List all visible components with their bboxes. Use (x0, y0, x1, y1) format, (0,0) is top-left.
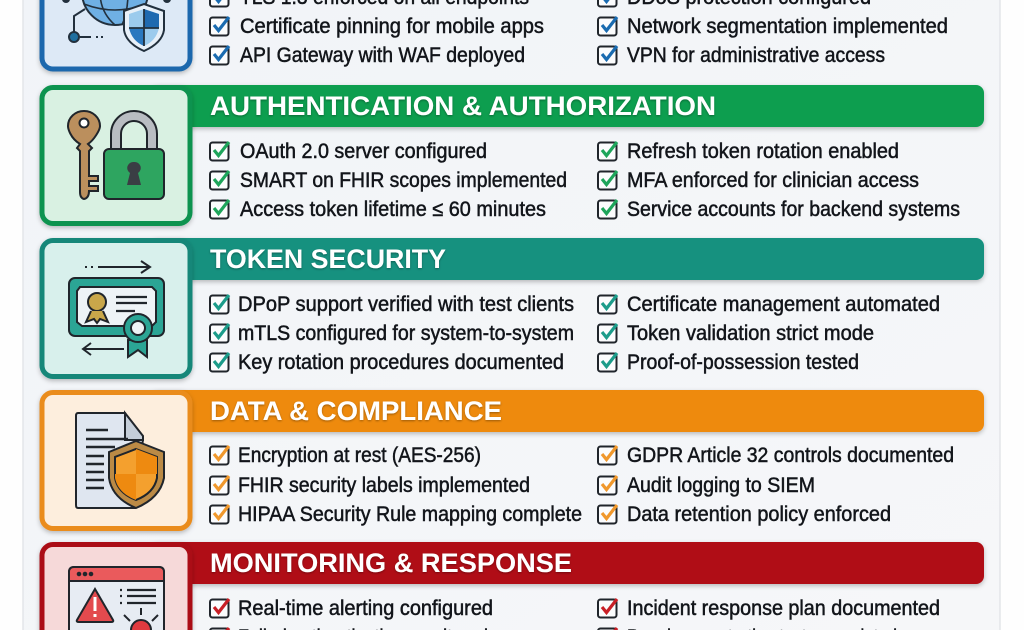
checklist: token: Proof-of-possession tested (627, 351, 859, 374)
checklist: token: DPoP support verified with test clients (238, 293, 574, 316)
heading: data: DATA & COMPLIANCE (210, 396, 502, 426)
checklist: authentication: Refresh token rotation enabled (627, 140, 899, 163)
panel: authentication and authorization (42, 85, 984, 224)
checklist: authentication: Service accounts for backend systems (627, 198, 960, 221)
checklist: authentication (210, 140, 960, 221)
checklist: network: Certificate pinning for mobile apps (240, 15, 544, 38)
icon box: data (42, 392, 190, 528)
checklist: authentication: OAuth 2.0 server configured (240, 140, 487, 163)
header bar: token (150, 238, 984, 280)
icon: globe with shield (62, 0, 171, 51)
heading: authentication: AUTHENTICATION & AUTHORIZATION (210, 91, 716, 121)
checklist: monitoring: Real-time alerting configured (238, 597, 493, 620)
checklist: token: Token validation strict mode (627, 322, 874, 345)
checklist: token: Certificate management automated (627, 293, 940, 316)
checklist: token: Key rotation procedures documented (238, 351, 564, 374)
panel: monitoring and response (42, 542, 984, 630)
icon box: network (42, 0, 190, 69)
checklist: data: FHIR security labels implemented (238, 474, 530, 497)
icon: alert window (69, 567, 164, 630)
header bar: authentication (150, 85, 984, 127)
checklist: authentication: Access token lifetime ≤ 60 minutes (240, 198, 546, 221)
checklist: token: mTLS configured for system-to-system (238, 322, 574, 345)
checklist: monitoring (210, 597, 940, 630)
checklist: data: GDPR Article 32 controls documented (627, 444, 954, 467)
checklist: network: Network segmentation implemented (627, 15, 948, 38)
heading: monitoring: MONITORING & RESPONSE (210, 548, 572, 578)
checklist: network: API Gateway with WAF deployed (240, 44, 525, 67)
panel: token security (42, 238, 984, 376)
checklist: authentication: MFA enforced for clinician access (627, 169, 919, 192)
checklist: monitoring: Incident response plan documented (627, 597, 940, 620)
checklist: authentication: SMART on FHIR scopes implemented (240, 169, 567, 192)
checklist: data: Data retention policy enforced (627, 503, 891, 526)
checklist: token (210, 293, 940, 374)
heading: token: TOKEN SECURITY (210, 244, 446, 274)
checklist: data: HIPAA Security Rule mapping complete (238, 503, 582, 526)
checklist: network: VPN for administrative access (627, 44, 885, 67)
icon box: monitoring (42, 544, 190, 630)
panel: data and compliance (42, 390, 984, 528)
header bar: data (150, 390, 984, 432)
icon: key and padlock (68, 111, 164, 199)
icon box: token (42, 240, 190, 376)
icon box: authentication (42, 88, 190, 224)
panel: network security (42, 0, 948, 69)
checklist: data: Audit logging to SIEM (627, 474, 815, 497)
icon: certificate with arrows (69, 261, 164, 357)
checklist: network (210, 0, 948, 67)
checklist: data: Encryption at rest (AES-256) (238, 444, 481, 467)
header bar: monitoring (150, 542, 984, 584)
checklist: data (210, 444, 954, 526)
icon: document with shield (76, 413, 164, 508)
